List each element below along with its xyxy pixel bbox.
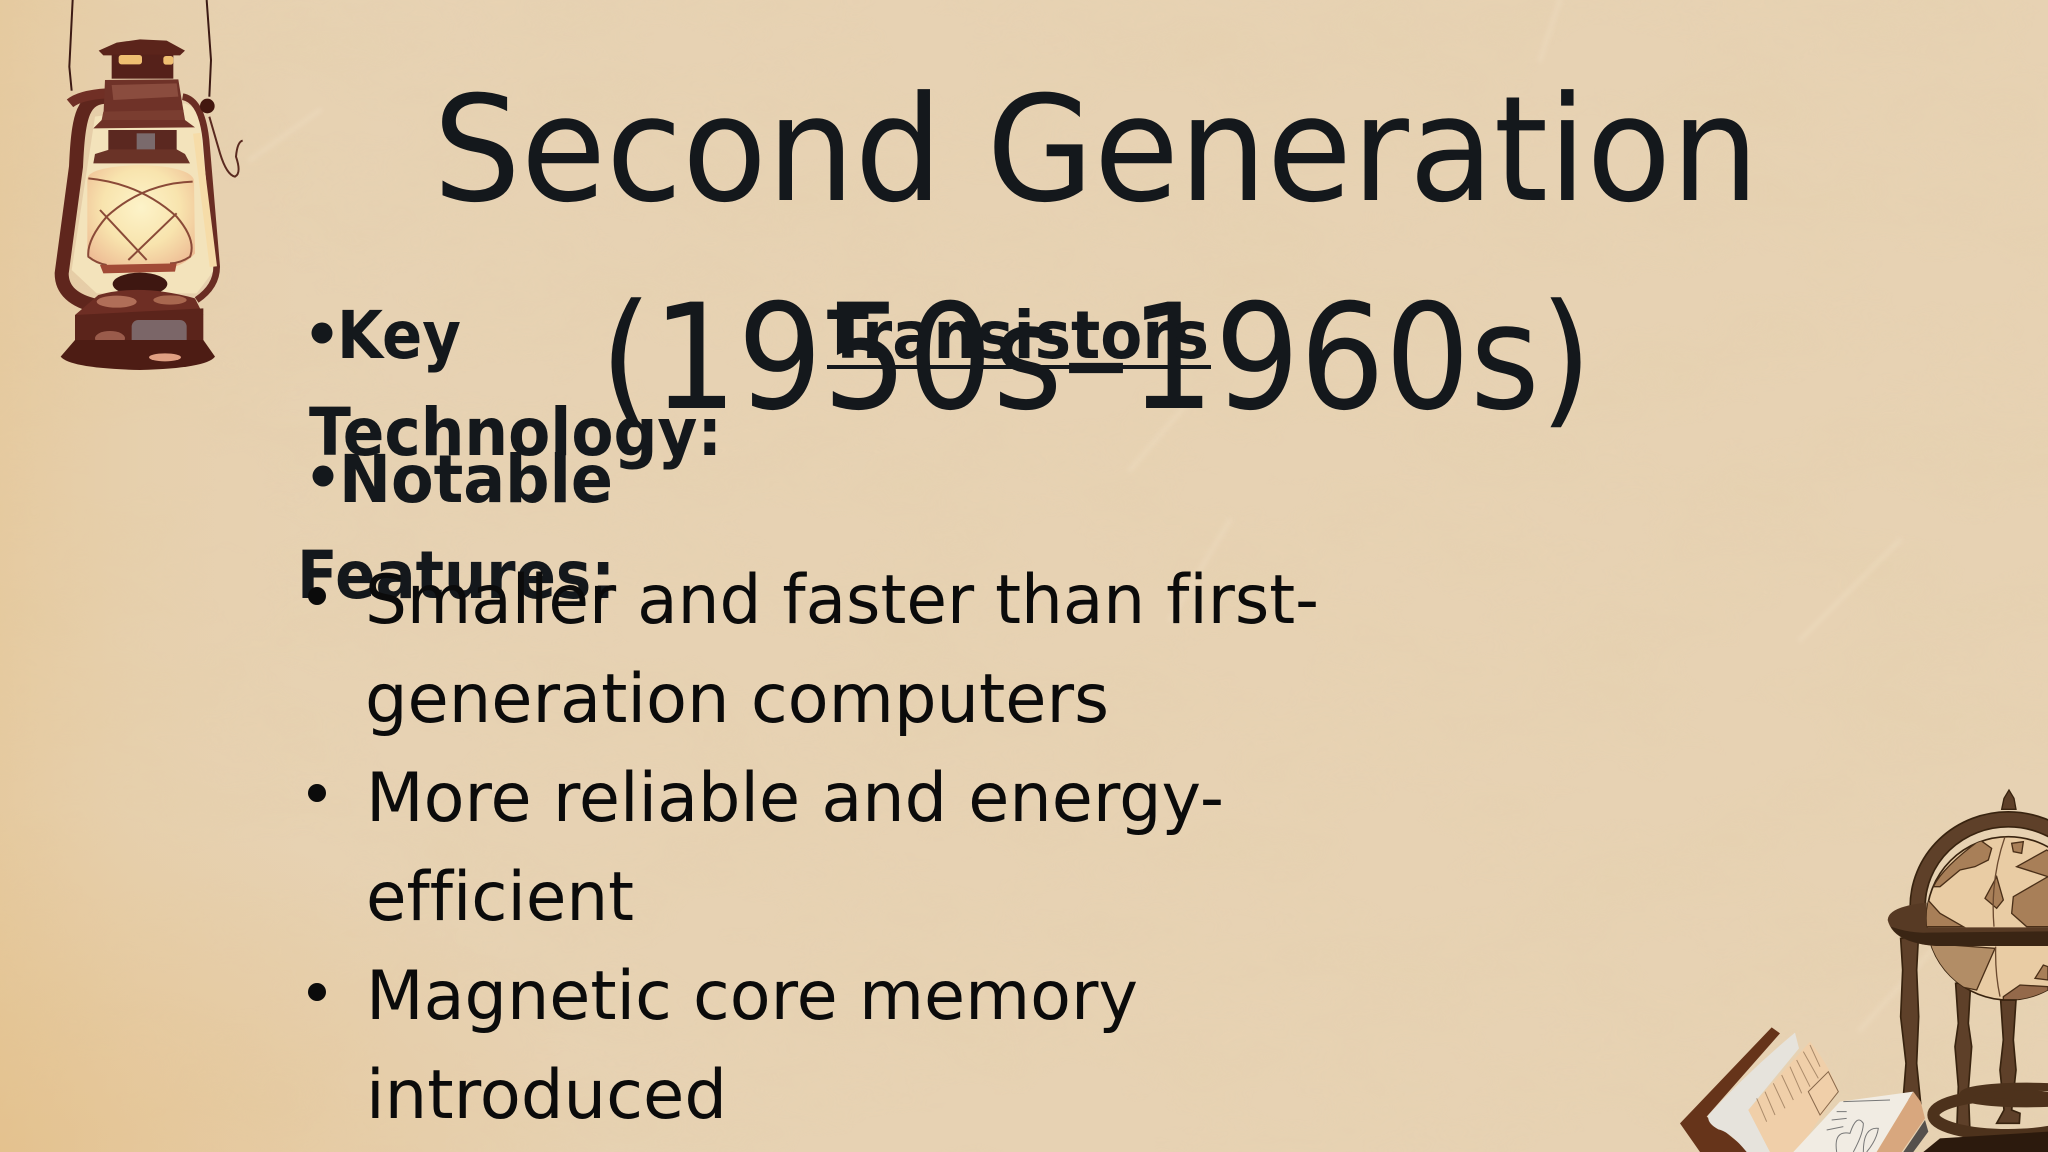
bullet: magnetic core memory xyxy=(308,957,1138,1135)
title xyxy=(433,65,1759,443)
lantern handle wires xyxy=(69,0,211,97)
globe base ring xyxy=(1933,1087,2048,1135)
front leg xyxy=(1997,1000,2020,1123)
globe horizon ring xyxy=(1888,903,2048,946)
bullet: magnetic core memory: Magnetic core memory xyxy=(366,957,1138,1036)
globe finial xyxy=(2002,790,2016,809)
feature bullet list xyxy=(308,561,1319,1135)
book xyxy=(1680,1027,1928,1152)
icon: globe on stand xyxy=(1680,790,2048,1152)
book left page xyxy=(1708,1033,1799,1152)
lantern hook xyxy=(209,117,243,177)
book page edge xyxy=(1877,1092,1925,1152)
globe land masses xyxy=(1925,840,2048,1003)
book open lower page xyxy=(1793,1092,1913,1152)
bullet: smaller and faster xyxy=(308,561,1319,739)
bullet: smaller and faster: generation computers xyxy=(365,660,1109,739)
key technology label xyxy=(309,297,722,471)
key technology value: Transistors xyxy=(827,297,1209,374)
notable features label: Features: xyxy=(297,537,615,614)
key technology label: Key xyxy=(337,297,461,374)
bullet: more reliable: efficient xyxy=(366,858,634,937)
lantern frame xyxy=(62,97,108,306)
lantern top cap xyxy=(99,39,185,55)
bullet: more reliable: More reliable and energy- xyxy=(366,759,1224,838)
notable features label xyxy=(297,441,615,614)
lantern wire cage xyxy=(88,178,193,265)
globe stand legs xyxy=(1901,938,1972,1133)
title line one: Second Generation xyxy=(433,65,1759,235)
notable features label: Notable xyxy=(339,441,613,518)
lantern glass base xyxy=(100,263,177,273)
lantern globe glass xyxy=(87,165,195,272)
lantern base xyxy=(75,290,203,315)
key technology label: Technology: xyxy=(309,394,722,471)
bullet: more reliable xyxy=(308,759,1224,937)
lantern side glass xyxy=(72,103,217,293)
lantern collar xyxy=(93,79,195,128)
globe sphere xyxy=(1927,837,2048,1000)
bullet: smaller and faster: Smaller and faster than first- xyxy=(365,561,1319,640)
book right peach page xyxy=(1748,1042,1838,1152)
bullet: magnetic core memory: introduced xyxy=(366,1056,727,1135)
globe meridian arch xyxy=(1918,819,2048,907)
title line two: (1950s–1960s) xyxy=(600,273,1592,443)
book cover xyxy=(1680,1027,1780,1152)
icon: hanging lantern xyxy=(61,0,243,370)
